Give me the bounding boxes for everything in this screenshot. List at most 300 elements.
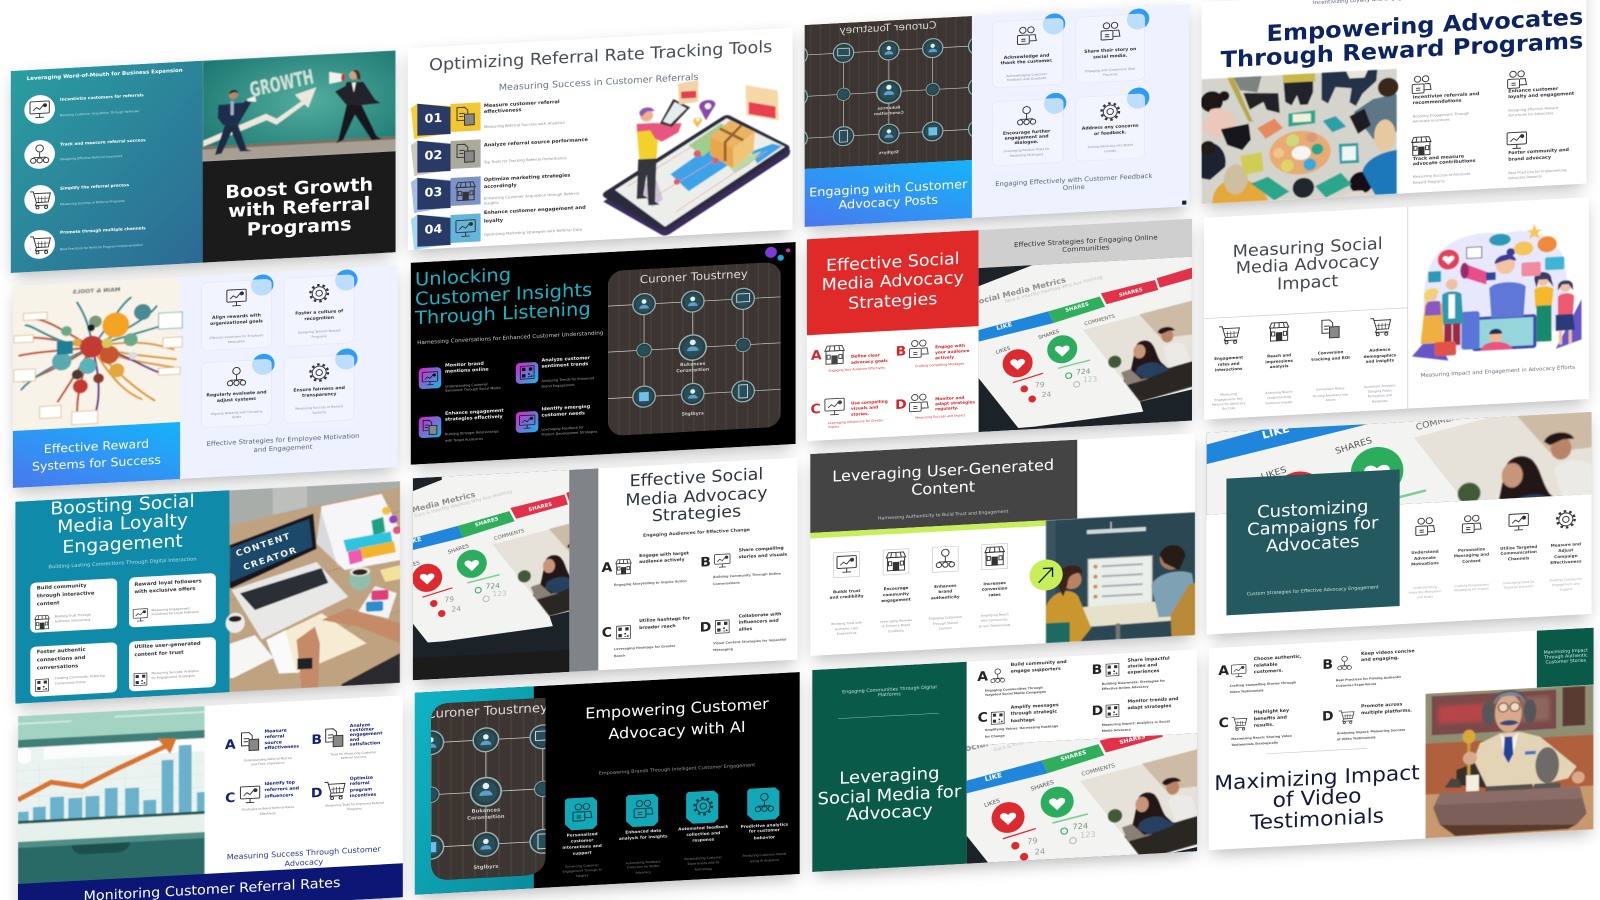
testimonial items: C — [1219, 715, 1229, 731]
referral items: Strategies to Boost Referral Rates — [241, 805, 294, 812]
strategy items: Visual Content Strategies for Impactful — [713, 638, 786, 645]
slide: Empowering Customer Advocacy with AI — [410, 672, 806, 900]
title: Effective Social — [630, 464, 763, 490]
photo: clay presenter figure — [1425, 684, 1594, 838]
title: Advocacy — [846, 801, 933, 825]
advocacy items: Share impactful — [1127, 655, 1170, 663]
campaign columns: Content — [1462, 558, 1481, 563]
slide: Unlocking Customer Insights Through Listening — [405, 242, 802, 477]
title: Boost Growth — [225, 174, 373, 203]
advocate actions: Structures for Advocates — [1508, 111, 1553, 118]
advocacy items: Amplifying Voices: Harnessing Hashtags — [985, 724, 1058, 732]
campaign columns — [1408, 509, 1582, 600]
strategy items: influencers and — [739, 617, 779, 625]
advocacy items: Measuring Impact: Analytics in Social — [1102, 719, 1170, 727]
slide: Boost Growth with Referral Programs — [11, 50, 396, 277]
title: Campaigns for — [1247, 514, 1379, 540]
title: Maximizing Impact — [1214, 759, 1420, 795]
slide: Customizing Campaigns for Advocates — [1118, 161, 1600, 720]
campaign columns: Crafting Personalized — [1454, 583, 1489, 588]
referral items: referral — [265, 733, 285, 740]
photo: social metrics dashboard — [412, 470, 570, 680]
benefit columns: authenticity — [931, 594, 960, 600]
cards: Goals — [232, 415, 241, 419]
subtitle: Measuring Success in Customer Referrals — [499, 72, 699, 93]
campaign columns: Campaign — [1554, 553, 1578, 559]
gray strip — [569, 468, 598, 672]
benefit columns: Boosting Trust with — [831, 621, 862, 626]
image: mirrored mind map — [13, 277, 182, 431]
title: with Referral — [228, 194, 370, 221]
title: Empowering Customer — [585, 695, 769, 723]
cards — [992, 8, 1149, 166]
numbered list: 01 — [424, 110, 442, 126]
title: Strategies — [848, 289, 937, 313]
advocate actions: Foster community and — [1508, 147, 1569, 156]
title: Effective Reward — [44, 437, 149, 456]
campaign columns: Leveraging Data for — [1503, 580, 1535, 585]
metric columns: Analyzing Reach: — [1265, 390, 1293, 395]
benefit columns: engagement — [881, 596, 911, 603]
subtitle: Engaging Communities Through Digital — [842, 684, 937, 695]
campaign columns: Targeted Outreach — [1503, 584, 1534, 590]
testimonial items: and engaging. — [1361, 655, 1399, 663]
strategy items: Measuring Success and Impact — [915, 413, 966, 420]
benefit columns: Amplifying Reach — [981, 612, 1009, 618]
benefit columns: community — [883, 591, 909, 597]
advocate actions: Best Practices for Implementing — [1508, 168, 1566, 175]
AI capability columns: Personalized — [567, 831, 598, 837]
title: Media Loyalty — [57, 510, 188, 537]
cards: Share their story on — [1084, 46, 1136, 54]
loyalty cards: Foster authentic — [37, 647, 86, 655]
photo: social metrics dashboard — [978, 256, 1192, 432]
benefit columns: Experiences — [837, 631, 857, 636]
numbered list: 02 — [424, 147, 442, 163]
network diagram — [608, 262, 781, 436]
strategy items: D — [895, 397, 907, 413]
benefit columns: Engaging Customers — [929, 615, 962, 621]
panel: green tag — [1537, 628, 1594, 688]
referral items: D — [311, 785, 322, 801]
insight items: strategies effectively — [445, 413, 503, 422]
AI capability columns: for customer — [749, 827, 781, 833]
benefit columns: brand — [938, 588, 952, 594]
advocacy items: hashtags — [1011, 717, 1035, 724]
caption: Measuring Impact and Engagement in Advocacy Efforts — [1421, 365, 1575, 379]
testimonial items: Highlight key — [1254, 707, 1289, 715]
subtitle: Harnessing Conversations for Enhanced Customer Understanding — [417, 330, 603, 346]
advocate actions: Enhance customer — [1508, 86, 1559, 94]
cards: Loyalty — [1104, 149, 1116, 153]
AI capability columns: response — [692, 836, 714, 842]
referral items: Effectively — [260, 811, 276, 816]
illustration: advocates with megaphone — [1412, 221, 1581, 363]
campaign columns: Communication — [1500, 549, 1537, 555]
numbered list: Analyze referral source performance — [484, 137, 589, 148]
strategy items: Monitor and — [935, 394, 964, 401]
panel: gray heading — [979, 219, 1192, 268]
testimonial items: of Video Testimonials — [1337, 735, 1376, 741]
insight items: Monitor brand — [445, 360, 484, 368]
strategy items: allies — [739, 626, 753, 632]
advocate actions: brand advocacy — [1508, 154, 1551, 162]
referral items: influencers — [265, 792, 294, 799]
tag text: Customer Stories — [1546, 657, 1587, 665]
title: Media Advocacy — [1236, 251, 1379, 278]
metric columns: rates and — [1218, 360, 1240, 366]
advocacy items: for Change — [985, 734, 1005, 739]
advocate actions: loyalty and engagement — [1508, 90, 1575, 100]
loyalty cards: conversations — [37, 663, 78, 671]
cards: thank the customer. — [1001, 57, 1053, 66]
advocate actions: Incentivize referrals and — [1413, 91, 1479, 100]
slide: Effective Reward Systems for Success — [13, 265, 398, 492]
advocacy items: Media Advocacy — [1102, 728, 1131, 733]
AI capability columns: Using AI Analytics — [750, 858, 779, 863]
title: Advocates — [1266, 532, 1360, 557]
metric columns: Engagement: Key — [1214, 397, 1243, 402]
subtitle: Engaging Audiences for Effective Change — [643, 527, 750, 539]
strategy items: Leveraging Hashtags for Greater — [614, 644, 676, 651]
metric columns: interactions — [1215, 365, 1243, 372]
advocate actions: Measuring Success of Advocate — [1413, 172, 1470, 179]
title: Testimonials — [1249, 803, 1384, 834]
teal side band — [415, 686, 534, 895]
strategy items: Leveraging Influencers for Greater — [828, 418, 884, 425]
strategy items: D — [700, 620, 711, 636]
title: Systems for Success — [32, 453, 161, 474]
campaign columns: Building Community — [1550, 577, 1582, 582]
campaign columns: Measure and — [1551, 541, 1581, 547]
testimonial items: Customer Experiences — [1336, 682, 1376, 688]
slide: Boosting Social Media Loyalty Engagement — [15, 480, 401, 708]
photo: growth wall with two people: GROWTH — [248, 65, 316, 102]
benefit columns: to Enhance Brand — [882, 623, 910, 628]
numbered list: Optimize marketing strategies — [484, 173, 570, 183]
strategy items: Building Community Through Online — [713, 572, 782, 579]
cards: Ensure fairness and — [293, 385, 345, 393]
insight items: Leveraging Feedback for — [542, 425, 584, 432]
strategy items: Engage with — [935, 342, 965, 349]
loyalty cards: content — [37, 600, 60, 607]
AI capability columns — [562, 787, 789, 879]
AI capability columns: Technology — [693, 867, 712, 872]
metric columns: Perception and — [1368, 393, 1392, 398]
strategy items: Impact — [828, 425, 840, 429]
testimonial items: B — [1322, 657, 1333, 673]
title: Programs — [247, 214, 352, 240]
strategy items: broader reach — [639, 623, 676, 631]
advocacy items: Effective Online Advocacy — [1102, 685, 1149, 691]
advocate actions: Advocate Incentives — [1413, 118, 1450, 124]
metric columns: Success — [1222, 406, 1236, 411]
AI capability columns: Engagement Through AI — [563, 868, 602, 874]
photo: content creator desk: CREATOR — [242, 546, 299, 573]
heading: Communities — [1062, 244, 1110, 254]
cards — [202, 269, 358, 428]
campaign columns: Utilize Targeted — [1500, 544, 1537, 550]
insight items: Analyze customer — [542, 355, 591, 363]
insight items: Brand Engagement — [542, 383, 575, 389]
loyalty cards: Utilize user-generated — [134, 641, 201, 650]
loyalty cards: Incentives for Loyal Followers — [151, 610, 199, 616]
insight items: sentiment trends — [542, 361, 589, 369]
strategy items: adapt strategies — [935, 399, 976, 406]
strategy items: Reach — [614, 654, 626, 658]
list of four referral tactics: Designing Effective Referral Incentives — [60, 154, 123, 161]
benefit columns: with Community- — [981, 617, 1008, 623]
cards: or feedback. — [1094, 129, 1127, 137]
testimonial items: multiple platforms. — [1361, 707, 1412, 716]
metric columns: Gauging Public — [1368, 388, 1392, 394]
strategy items: stories. — [851, 411, 870, 416]
list of four referral tactics: Track and measure referral success — [60, 137, 146, 147]
advocate actions: Reward Programs — [1413, 179, 1445, 185]
slide: Leveraging Social Media for Advocacy — [812, 607, 1295, 900]
panel: navy title band — [18, 863, 403, 900]
insight items: Sentiment Through Social Media — [445, 386, 501, 393]
photo: growth wall with two people — [203, 50, 396, 162]
cards: adjust systems — [217, 396, 256, 403]
strategy items: Engaging Storytelling to Inspire Action — [614, 579, 687, 587]
testimonial items: Analyzing Impact: Measuring Success — [1337, 728, 1405, 735]
benefit columns: Increases — [983, 580, 1006, 586]
referral items: B — [311, 732, 322, 748]
slide: Monitoring Customer Referral Rates — [18, 695, 403, 900]
subtitle: Empowering Brands Through Intelligent Customer Engagement — [599, 762, 755, 777]
referral items: C — [225, 790, 235, 806]
referral items: source — [265, 739, 282, 746]
benefit columns: conversion — [982, 585, 1008, 591]
strategy items: A — [811, 348, 822, 364]
advocacy items: Monitor trends and — [1127, 696, 1179, 704]
photo: content creator desk: CONTENT — [235, 532, 292, 559]
advocacy items: Engaging Communities Through — [985, 686, 1043, 693]
caption: and Engagement — [254, 443, 313, 454]
title: Through Reward Programs — [1221, 27, 1583, 73]
loyalty cards: Building Trust Through — [55, 613, 91, 619]
strategy items: B — [700, 555, 711, 571]
decorative dots — [765, 246, 790, 262]
metric columns: Conversion Rates: — [1316, 386, 1345, 392]
benefit columns: Builds trust — [833, 588, 860, 594]
title: Social Media for — [818, 782, 962, 809]
photo: team meeting — [1046, 512, 1195, 643]
title: Effective Social — [826, 248, 960, 275]
AI capability columns: Collection for Better — [627, 864, 660, 870]
benefit columns: Leveraging Reviews — [880, 618, 912, 624]
loyalty cards: connections and — [37, 655, 86, 663]
cards: Systems — [312, 410, 326, 415]
referral items — [225, 721, 384, 818]
slide: Engaging with Customer Advocacy Posts — [772, 0, 1190, 233]
strategy items: C — [602, 625, 612, 641]
title: Measuring Social — [1233, 234, 1383, 262]
list of four referral tactics: Boosting Customer Acquisition Through Referrals — [60, 109, 139, 117]
illustration: phone map with delivery person — [603, 75, 790, 239]
insight items: Enhance engagement — [445, 407, 505, 416]
list of four referral tactics: Measuring Success of Referral Programs — [60, 199, 125, 206]
testimonial items: customers. — [1254, 667, 1283, 675]
referral items: and — [350, 736, 359, 743]
referral items: engagement — [350, 730, 383, 738]
metric columns: Turning Advocacy into — [1312, 393, 1348, 398]
benefit columns: Authentic User — [835, 626, 859, 631]
cards: Motivation — [228, 339, 245, 344]
cards: Designing Tailored Reward — [298, 328, 340, 335]
loyalty cards: content for trust — [134, 650, 184, 658]
list of four referral tactics: Best Practices for Referral Program Implementation — [60, 243, 143, 251]
cards: recognition — [304, 314, 334, 322]
photo: social metrics dashboard — [966, 733, 1198, 864]
campaign columns: Adjust — [1558, 547, 1573, 552]
strategy items: Share compelling — [739, 545, 784, 553]
slide: Effective Social Media Advocacy Strategies white — [324, 381, 798, 706]
metric columns: demographics — [1364, 352, 1397, 359]
testimonial items: Choose authentic, — [1254, 653, 1302, 662]
campaign columns: Support — [1559, 587, 1573, 592]
title: Customer Insights — [415, 279, 592, 310]
strategy items — [810, 337, 976, 430]
campaign columns: Engagement and — [1552, 582, 1580, 587]
advocacy items: D — [1092, 703, 1103, 719]
testimonial items: D — [1322, 709, 1334, 725]
subtitle: Platforms — [878, 691, 901, 698]
numbered list: Measuring Referral Success with Analytics — [484, 121, 565, 129]
referral items: A — [225, 737, 236, 753]
AI capability columns: interactions and — [562, 843, 602, 849]
metric columns: tracking and ROI — [1311, 354, 1350, 361]
loyalty cards: Measuring Success: Analytics — [151, 669, 199, 675]
testimonial items: Testimonials Strategically — [1231, 741, 1278, 747]
referral items: Optimize — [350, 774, 373, 781]
campaign columns: Messaging and — [1454, 551, 1489, 558]
list of four referral tactics — [24, 89, 146, 260]
title: Empowering Advocates — [1267, 3, 1583, 47]
advocacy items: adapt strategies — [1127, 703, 1172, 711]
cards: Engaging with Customers: Best — [1085, 67, 1136, 73]
campaign columns: Advocate — [1414, 554, 1436, 560]
network diagram — [430, 698, 546, 880]
strategy items: Use compelling — [851, 398, 888, 405]
advocate actions: Designing Effective Reward — [1508, 106, 1558, 113]
testimonial items: A — [1218, 663, 1230, 679]
metric columns: Understanding — [1267, 395, 1291, 400]
strategy items: audience actively — [639, 556, 685, 565]
benefit columns: Encourage — [884, 585, 909, 591]
numbered list: Enhancing Customer Acquisition through Referral — [484, 192, 579, 201]
insight items: Identify emerging — [542, 403, 590, 412]
campaign columns: Motivations — [1411, 560, 1439, 566]
campaign columns: Channels — [1508, 555, 1530, 561]
testimonial items: Best Practices for Filming Authentic — [1336, 675, 1401, 682]
numbered list: Enhance customer engagement and — [484, 205, 586, 216]
insight items: mentions online — [445, 366, 489, 374]
cards: Regularly evaluate and — [206, 389, 267, 398]
testimonial items: Keep videos concise — [1361, 648, 1415, 656]
AI capability columns: analysis for insights — [619, 833, 668, 840]
cards: Feedback with Gratitude — [1007, 76, 1046, 82]
strategy items: Messaging — [713, 647, 734, 652]
cards: Aligning Rewards with Company — [211, 409, 263, 416]
strategy items: C — [810, 401, 821, 417]
cards: engagement and — [1005, 133, 1049, 141]
strategy items: your audience — [935, 348, 970, 354]
strategy items: visuals and — [851, 404, 878, 410]
metric columns: Response — [1372, 399, 1388, 404]
insight items: customer needs — [542, 410, 585, 418]
referral items: Measuring Tools for Improved Referral — [325, 801, 384, 808]
insight items: Product Development Strategies — [542, 430, 598, 437]
campaign columns: Advocate Motivation — [1408, 589, 1441, 595]
referral items: incentives — [350, 791, 377, 799]
loyalty cards: Measuring Engagement: — [151, 606, 191, 612]
advocate actions: Advocate Rewards — [1508, 175, 1542, 180]
numbered list: Measure customer referral — [484, 99, 560, 109]
lime accent strip — [810, 520, 1046, 538]
subtitle: Harnessing Authenticity to Build Trust and Engagement — [878, 509, 1009, 522]
caption: Effective Strategies for Employee Motivation — [207, 432, 360, 448]
advocacy items: stories and — [1127, 662, 1157, 669]
panel: black title block — [203, 151, 396, 263]
benefit columns: Through Shared — [931, 621, 958, 626]
strategy items: regularly. — [935, 405, 959, 411]
numbered list: 04 — [424, 221, 443, 237]
photo: mirrored network diagram — [804, 16, 972, 169]
campaign columns: Messaging for Impact — [1454, 587, 1490, 592]
metric columns: impressions — [1265, 357, 1294, 364]
panel: blue title block — [805, 160, 972, 227]
numbered list: 03 — [424, 184, 442, 200]
insight items — [419, 354, 598, 444]
caption: Measuring Success Through Customer — [227, 844, 382, 861]
benefit columns: Credibility — [888, 629, 904, 633]
testimonial items: Crafting Compelling Stories Through — [1230, 680, 1296, 688]
numbered list: accordingly — [484, 183, 517, 190]
numbered list: Insights — [484, 201, 499, 206]
panel: blue title block — [13, 422, 180, 488]
caption: Advocacy — [284, 857, 324, 868]
AI capability columns: Enhancing Customer — [565, 863, 600, 869]
referral items: referrers and — [265, 785, 299, 793]
slide: Measuring Social Media Advocacy Impact — [1204, 197, 1589, 424]
referral items: effectiveness — [265, 743, 299, 751]
referral items: Tools for Measuring Customer — [329, 750, 377, 757]
advocacy items: through strategic — [1011, 708, 1057, 716]
testimonial items: results. — [1254, 721, 1274, 728]
benefit columns: rates — [989, 591, 1001, 597]
loyalty cards: through interactive — [37, 591, 95, 599]
AI capability columns: behavior — [754, 834, 776, 840]
cards: Marketing Strategies — [1010, 152, 1044, 158]
loyalty cards: Creating Community: Fostering — [55, 674, 105, 680]
icon: lime arrow badge — [1030, 559, 1063, 591]
panel: green block — [812, 662, 967, 872]
strategy items: stories and visuals — [739, 551, 788, 560]
cards: organizational goals — [210, 318, 263, 327]
photo: social metrics banner — [1206, 412, 1592, 515]
AI capability columns: Advocacy — [635, 870, 651, 875]
loyalty cards: for Engagement Strategies — [151, 674, 195, 680]
slide: Effective Social Media Advocacy Strategies red — [807, 172, 1279, 497]
referral items: Measure — [265, 727, 287, 734]
advocate actions: Track and measure — [1413, 153, 1464, 162]
metric columns: Audience — [1369, 346, 1391, 352]
title: Media Advocacy — [625, 483, 767, 510]
AI capability columns: Automated feedback — [678, 823, 729, 831]
panel: dark teal title block — [1226, 469, 1400, 615]
